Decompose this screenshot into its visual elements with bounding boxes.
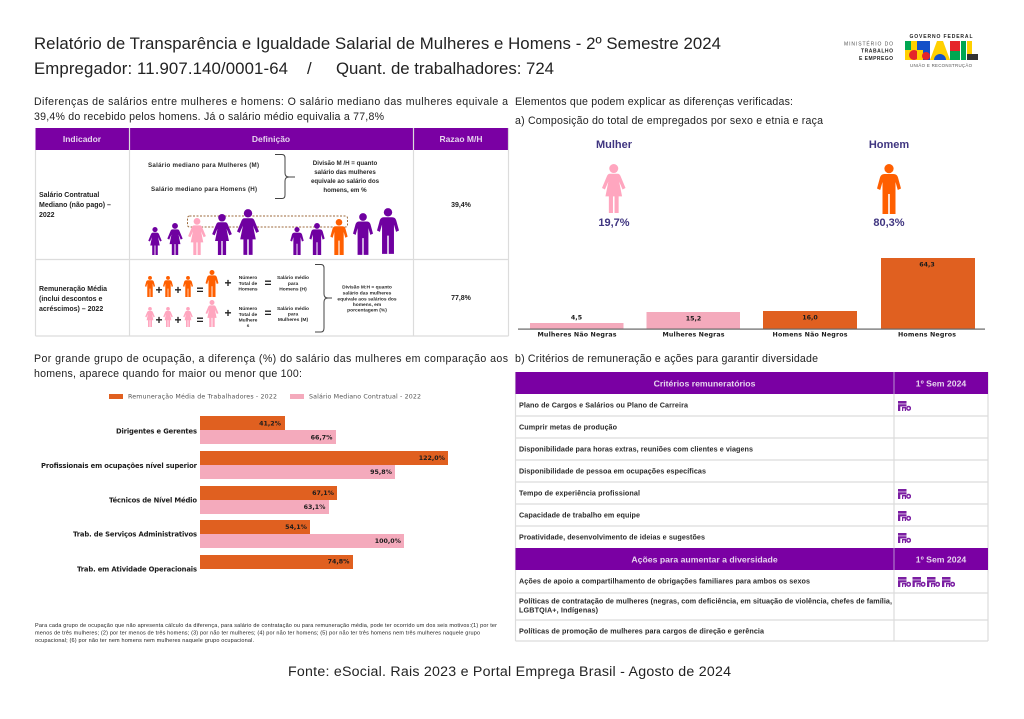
row 1 indicator: Salário Contratual [39,192,99,199]
criteria rows: Plano de Cargos e Salários ou Plano de Carreira [519,400,689,410]
icon: woman share 19,7%: 19,7% [598,217,630,229]
intro text: occupation groups [34,353,508,380]
row 1 definition text: salário das mulheres [314,169,376,176]
header: ações para aumentar a diversidade [516,548,988,570]
table: indicators [36,128,508,336]
row 1 definition text: equivale ao salário dos [311,178,380,185]
group: serviços administrativos: 100,0% [375,538,402,545]
criteria rows: Capacidade de trabalho em equipe [519,510,640,520]
table header: Indicador [63,134,102,144]
criteria icons [898,401,910,543]
row 2 men formula [145,270,309,297]
group: dirigentes e gerentes: 66,7% [311,434,333,442]
header: ações para aumentar a diversidade: Ações para aumentar a diversidade [631,554,778,564]
logo: governo federal brasil: UNIÃO E RECONSTRUÇÃO [910,63,973,68]
group: serviços administrativos: 54,1% [285,524,308,531]
bar chart: composition by sex and race: 64,3 [919,262,935,268]
row 1 indicator: 2022 [39,212,55,219]
logo: ministério do trabalho e emprego: E EMPREGO [859,56,893,62]
row 2 men formula: Número [239,275,257,281]
row 1 women and men pictogram [148,208,399,255]
group: técnicos de nível médio: 63,1% [304,504,326,511]
action icons [898,577,954,587]
bar chart: composition by sex and race [518,258,985,338]
intro text: occupation groups: homens, aparece quando for maior ou menor que 100: [34,368,302,380]
footnote: Para cada grupo de ocupação que não apresenta cálculo da diferença, para salário de contratação ou para remuneração média, pode ter ocorrido um dos seis motivos:(1) por ter [35,623,497,629]
row 2 women formula [145,300,309,329]
icon: man share 80,3%: 80,3% [873,217,905,229]
row 2 women formula: para [288,312,298,318]
row 2 division note: equivale aos salários dos [337,296,397,302]
footnote [35,623,497,644]
bar chart: composition by sex and race: Mulheres Negras [662,332,725,338]
title: Quant. de trabalhadores: 724 [336,59,554,78]
heading: explanatory elements: Elementos que podem explicar as diferenças verificadas: [515,96,793,108]
group: serviços administrativos: Trab. de Serviços Administrativos [73,530,197,538]
row 2 women formula: + [155,313,163,327]
row 2 women formula: + [174,313,182,327]
intro text: occupation groups: Por grande grupo de ocupação, a diferença (%) do salário das mulheres em comparação aos [34,353,508,365]
row 2 men formula: + [174,283,182,297]
action rows: Políticas de contratação de mulheres (negras, com deficiência, em situação de violência, chefes de família, [519,596,892,606]
header: critérios remuneratórios [516,372,988,394]
title: Relatório de Transparência e Igualdade Salarial de Mulheres e Homens - 2º Semestre 2024 [34,34,721,53]
group: dirigentes e gerentes: 41,2% [259,420,282,428]
table header: Razao M/H [440,134,482,144]
bar chart: composition by sex and race: 4,5 [571,314,582,322]
table header: Definição [252,134,290,144]
row 1 ratio: 39,4% [451,202,472,209]
chart legend: Remuneração Média de Trabalhadores - 2022 [128,392,277,400]
group: técnicos de nível médio: 67,1% [312,490,335,497]
title: Empregador: 11.907.140/0001-64 [34,59,288,78]
intro text: salary differences: Diferenças de salários entre mulheres e homens: O salário mediano das mulheres equivale a [34,96,508,108]
group: profissionais nível superior: 95,8% [370,469,393,476]
group: profissionais nível superior: 122,0% [419,455,446,462]
source: Fonte: eSocial. Rais 2023 e Portal Emprega Brasil - Agosto de 2024 [288,664,731,680]
row 2 ratio: 77,8% [451,295,472,302]
header: critérios remuneratórios: Critérios remuneratórios [654,378,756,388]
row 2 indicator: (inclui descontos e [39,296,103,303]
bar chart: composition by sex and race: Homens Negros [898,332,956,338]
row 1 indicator: Mediano (não pago) – [39,202,111,209]
logo: ministério do trabalho e emprego: MINISTÉRIO DO [844,40,893,48]
row 2 women formula: = [196,313,204,327]
row 2 women formula: Total de [239,312,257,318]
row 2 division note [315,264,397,332]
row 2 division note: salário das mulheres [343,290,392,296]
row 1 definition text: Divisão M /H = quanto [313,160,377,167]
row 2 division note: Divisão M:H = quanto [342,284,392,290]
row 1 definition text [148,154,380,198]
action rows: Ações de apoio a compartilhamento de obrigações familiares para ambos os sexos [519,576,810,586]
title [34,34,721,78]
table: criteria and actions [516,372,988,641]
row 2 division note: porcentagem (%) [347,308,387,314]
group: profissionais nível superior: Profissionais em ocupações nível superior [41,462,198,470]
bar chart: composition by sex and race: 15,2 [686,316,701,322]
row 2 men formula: + [155,283,163,297]
header: ações para aumentar a diversidade: 1º Sem 2024 [916,554,966,564]
group: técnicos de nível médio: Técnicos de Nível Médio [109,496,197,504]
row 2 men formula: = [264,276,272,290]
bar chart: composition by sex and race: 16,0 [802,314,818,322]
criteria rows: Disponibilidade de pessoa em ocupações específicas [519,466,706,476]
row 1 definition text: homens, em % [323,187,367,194]
group: atividade operacionais [77,555,353,574]
logo: ministério do trabalho e emprego: TRABALHO [861,48,893,54]
row 2 men formula: = [196,283,204,297]
heading: explanatory elements [515,96,823,127]
bar chart: composition by sex and race: Mulheres Não Negras [538,332,617,338]
criteria rows: Cumprir metas de produção [519,422,618,432]
group: técnicos de nível médio [109,486,337,514]
row 2 men formula: + [224,276,232,290]
heading: explanatory elements: a) Composição do total de empregados por sexo e etnia e raça [515,115,823,127]
criteria rows: Disponibilidade para horas extras, reuniões com clientes e viagens [519,444,753,454]
table header [36,128,508,150]
icon: woman share 19,7%: Mulher [596,139,633,151]
icon: woman share 19,7% [596,139,633,229]
row 2 women formula: = [264,306,272,320]
heading: criteria and actions: b) Critérios de remuneração e ações para garantir diversidade [515,353,818,365]
action rows [519,576,892,636]
row 2 men formula: Total de [239,281,257,287]
row 2 women formula: + [224,306,232,320]
row 2 women formula: Mulheres (M) [278,317,308,323]
row 2 men formula: Homens (H) [279,286,307,292]
title: / [307,59,312,78]
row 2 indicator: Remuneração Média [39,286,107,293]
chart legend: Salário Mediano Contratual - 2022 [309,392,421,400]
row 2 women formula: Número [239,306,257,312]
logo: governo federal brasil [905,34,978,68]
group: serviços administrativos [73,520,404,548]
group: dirigentes e gerentes: Dirigentes e Gerentes [116,428,197,436]
group: profissionais nível superior [41,451,448,479]
group: atividade operacionais: Trab. em Atividade Operacionais [77,566,197,574]
icon: man share 80,3% [869,139,909,229]
icon: man share 80,3%: Homem [869,139,909,151]
row 2 men formula: Salário médio [277,275,309,281]
row 2 men formula: para [288,281,298,287]
chart legend [109,392,421,400]
row 2 men formula: Homens [238,286,258,292]
footnote: menos de três mulheres; (2) por ter menos de três homens; (3) por não ter mulheres; (4) por não ter homens; (5) por não ter três homens nem três mulheres naquele grupo [35,630,480,636]
header: critérios remuneratórios: 1º Sem 2024 [916,378,966,388]
action rows: Políticas de promoção de mulheres para cargos de direção e gerência [519,626,765,636]
intro text: salary differences: 39,4% do recebido pelos homens. Já o salário médio equivalia a 77,8% [34,111,385,123]
group: dirigentes e gerentes [116,416,336,444]
row 1 definition text: Salário mediano para Homens (H) [151,186,257,193]
row 2 division note: homens, em [353,302,382,308]
bar chart: pay ratio by occupation group [41,416,448,574]
bar chart: composition by sex and race: Homens Não Negros [772,332,848,338]
row 2 women formula: s [247,324,250,329]
row 2 women formula: Salário médio [277,306,309,312]
row 1 definition text: Salário mediano para Mulheres (M) [148,162,259,169]
criteria rows: Tempo de experiência profissional [519,488,640,498]
criteria rows: Proatividade, desenvolvimento de ideias e sugestões [519,532,705,542]
logo: governo federal brasil: GOVERNO FEDERAL [910,34,972,40]
row 2 indicator: acréscimos) – 2022 [39,306,103,313]
action rows: LGBTQIA+, Indígenas) [519,606,599,614]
criteria rows [519,400,753,542]
logo: ministério do trabalho e emprego [844,40,893,62]
footnote: ocupacional; (6) por não ter nem homens nem mulheres naquele grupo ocupacional. [35,638,254,644]
row 2 women formula: Mulhere [239,318,258,324]
intro text: salary differences [34,96,508,123]
group: atividade operacionais: 74,8% [328,558,350,566]
